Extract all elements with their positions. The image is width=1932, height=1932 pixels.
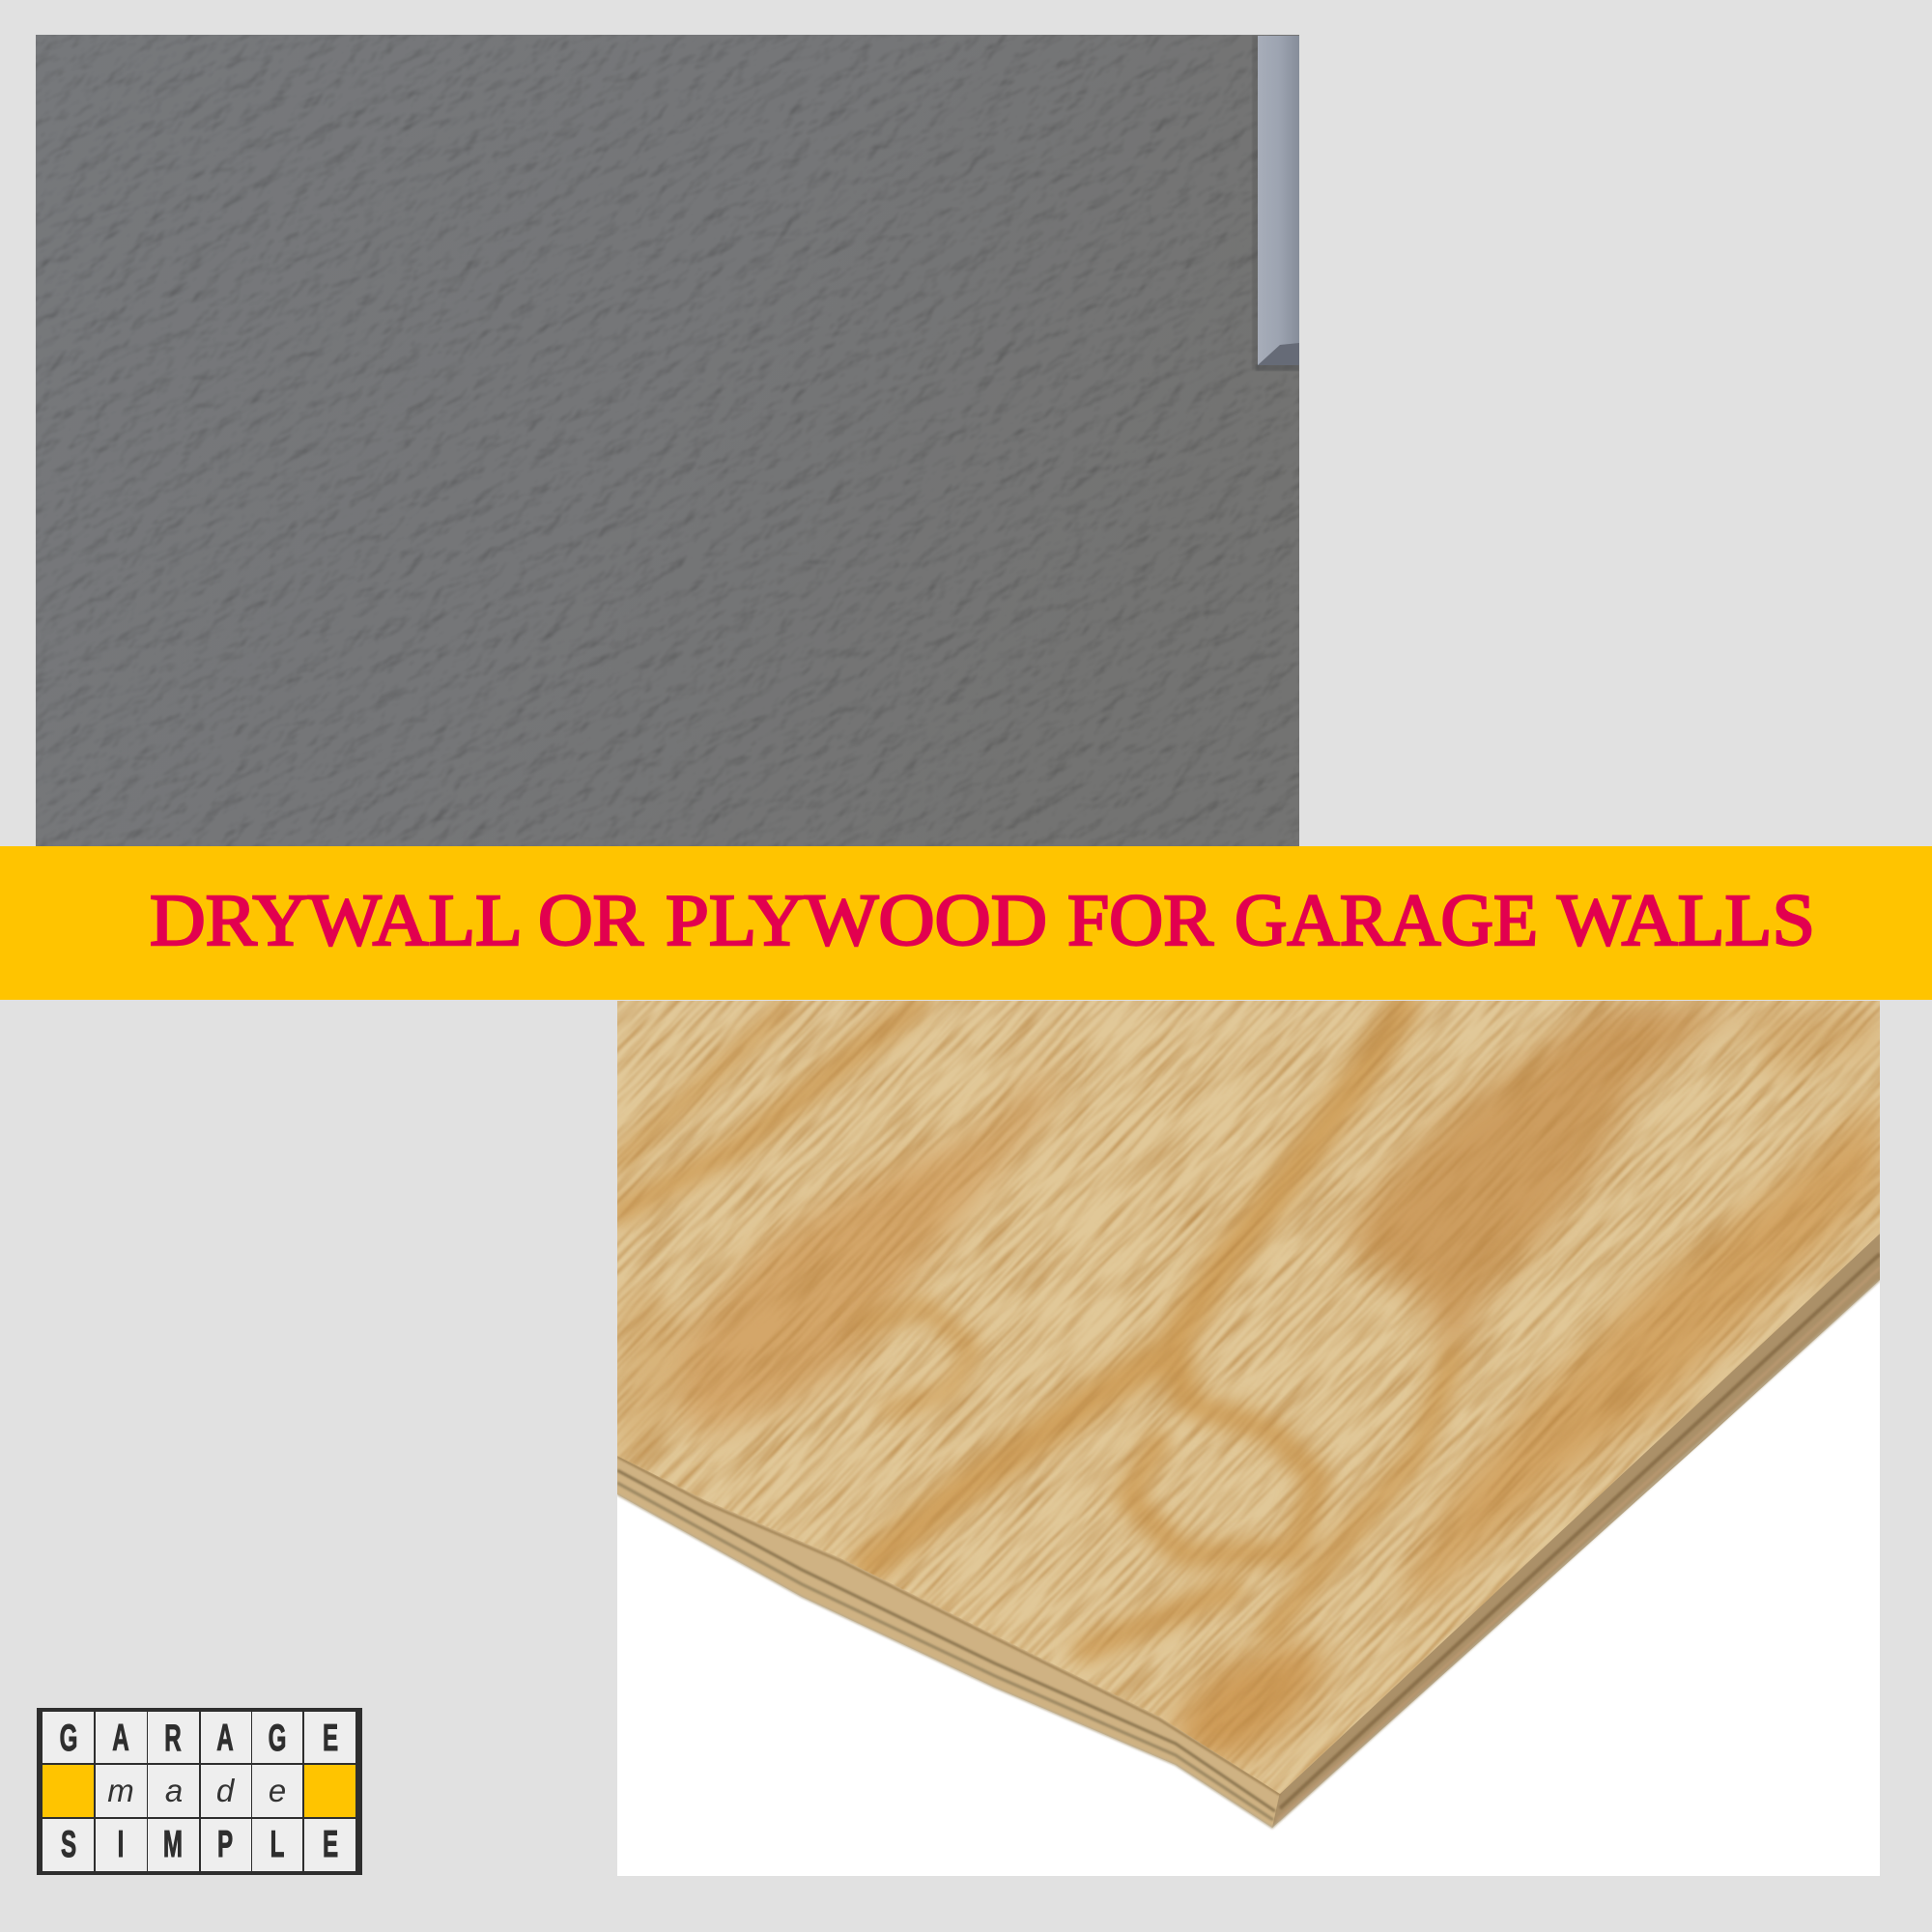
logo word: GARAGE: G <box>60 1717 77 1758</box>
logo word: SIMPLE <box>61 1823 338 1864</box>
title banner <box>0 846 1932 1000</box>
white photo background <box>617 1281 1880 1876</box>
logo word: GARAGE: R <box>164 1717 182 1758</box>
logo word: made: a <box>165 1773 183 1808</box>
logo word: SIMPLE: I <box>118 1823 124 1864</box>
logo word: GARAGE: A <box>216 1717 234 1758</box>
logo word: SIMPLE: E <box>323 1823 338 1864</box>
heading: GARAGE <box>1235 880 1538 961</box>
heading: OR <box>538 880 643 961</box>
heading: PLYWOOD <box>666 880 1047 961</box>
logo: Garage Made Simple <box>37 1708 362 1875</box>
logo word: GARAGE: A <box>112 1717 129 1758</box>
logo word: made <box>107 1773 286 1808</box>
panel: plywood photo <box>617 1001 1880 1876</box>
grain veins <box>617 1005 1454 1651</box>
logo frame <box>37 1708 362 1875</box>
logo word: made: e <box>269 1773 286 1808</box>
logo word: GARAGE: E <box>323 1717 338 1758</box>
logo cells <box>43 1712 355 1871</box>
wood base colour <box>617 1001 1880 1876</box>
drywall stucco texture <box>36 35 1299 848</box>
plywood side edges <box>617 1234 1880 1828</box>
drywall base colour <box>36 35 1299 848</box>
logo word: made: m <box>107 1773 134 1808</box>
logo word: SIMPLE: L <box>270 1823 284 1864</box>
wall plate trim <box>1252 36 1299 371</box>
fine wood grain <box>617 1001 1880 1876</box>
logo word: SIMPLE: P <box>217 1823 233 1864</box>
logo word: GARAGE: G <box>269 1717 286 1758</box>
logo word: made: d <box>216 1773 236 1808</box>
heading: DRYWALL <box>150 880 520 961</box>
banner bar <box>0 846 1932 1000</box>
heading: WALLS <box>1557 880 1815 961</box>
panel: drywall photo <box>36 35 1299 848</box>
grain figure patches <box>617 1005 1880 1765</box>
heading: FOR <box>1067 880 1213 961</box>
plywood top face with grain <box>617 1001 1880 1876</box>
logo word: GARAGE <box>60 1717 338 1758</box>
logo word: SIMPLE: S <box>61 1823 76 1864</box>
logo word: SIMPLE: M <box>163 1823 183 1864</box>
